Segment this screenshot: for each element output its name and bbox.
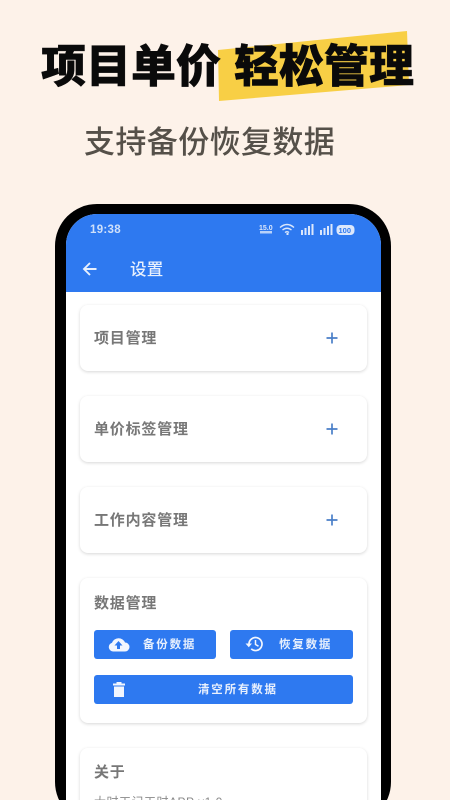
button: restore data xyxy=(230,630,353,659)
label: 清空所有数据 xyxy=(198,684,278,696)
icon: history xyxy=(246,636,263,652)
icon: plus xyxy=(326,424,338,434)
card: project management xyxy=(80,305,367,371)
title: 项目单价 xyxy=(41,41,221,92)
icon: plus xyxy=(326,514,338,526)
status bar time: 19:38 xyxy=(90,224,121,236)
screen title: 设置 xyxy=(130,261,163,279)
card: about xyxy=(80,748,367,800)
card: unit price tag management xyxy=(80,396,367,462)
back arrow xyxy=(82,262,96,276)
status bar icons: 100 xyxy=(338,226,351,235)
heading: 关于 xyxy=(94,764,126,781)
title: 轻松管理 xyxy=(234,41,414,92)
phone screen xyxy=(66,214,381,800)
icon: plus xyxy=(326,332,338,344)
label: 恢复数据 xyxy=(279,639,332,651)
icon: trash xyxy=(113,682,125,697)
label: 单价标签管理 xyxy=(94,421,189,438)
heading: 数据管理 xyxy=(94,595,157,612)
icon: cloud upload xyxy=(108,638,130,652)
label: 工作内容管理 xyxy=(94,512,189,529)
title highlight: yellow slanted band xyxy=(218,31,409,101)
phone frame xyxy=(55,204,391,800)
app bar xyxy=(66,214,381,292)
subtitle: 支持备份恢复数据 xyxy=(84,125,335,160)
title xyxy=(41,41,414,92)
status bar icons xyxy=(259,224,354,235)
button: backup data xyxy=(94,630,216,659)
label: 项目管理 xyxy=(94,330,157,347)
button: clear all data xyxy=(94,675,353,704)
card: data management xyxy=(80,578,367,723)
card: work content management xyxy=(80,487,367,553)
label: 备份数据 xyxy=(143,639,196,651)
status bar icons: 15.0 xyxy=(259,225,273,232)
